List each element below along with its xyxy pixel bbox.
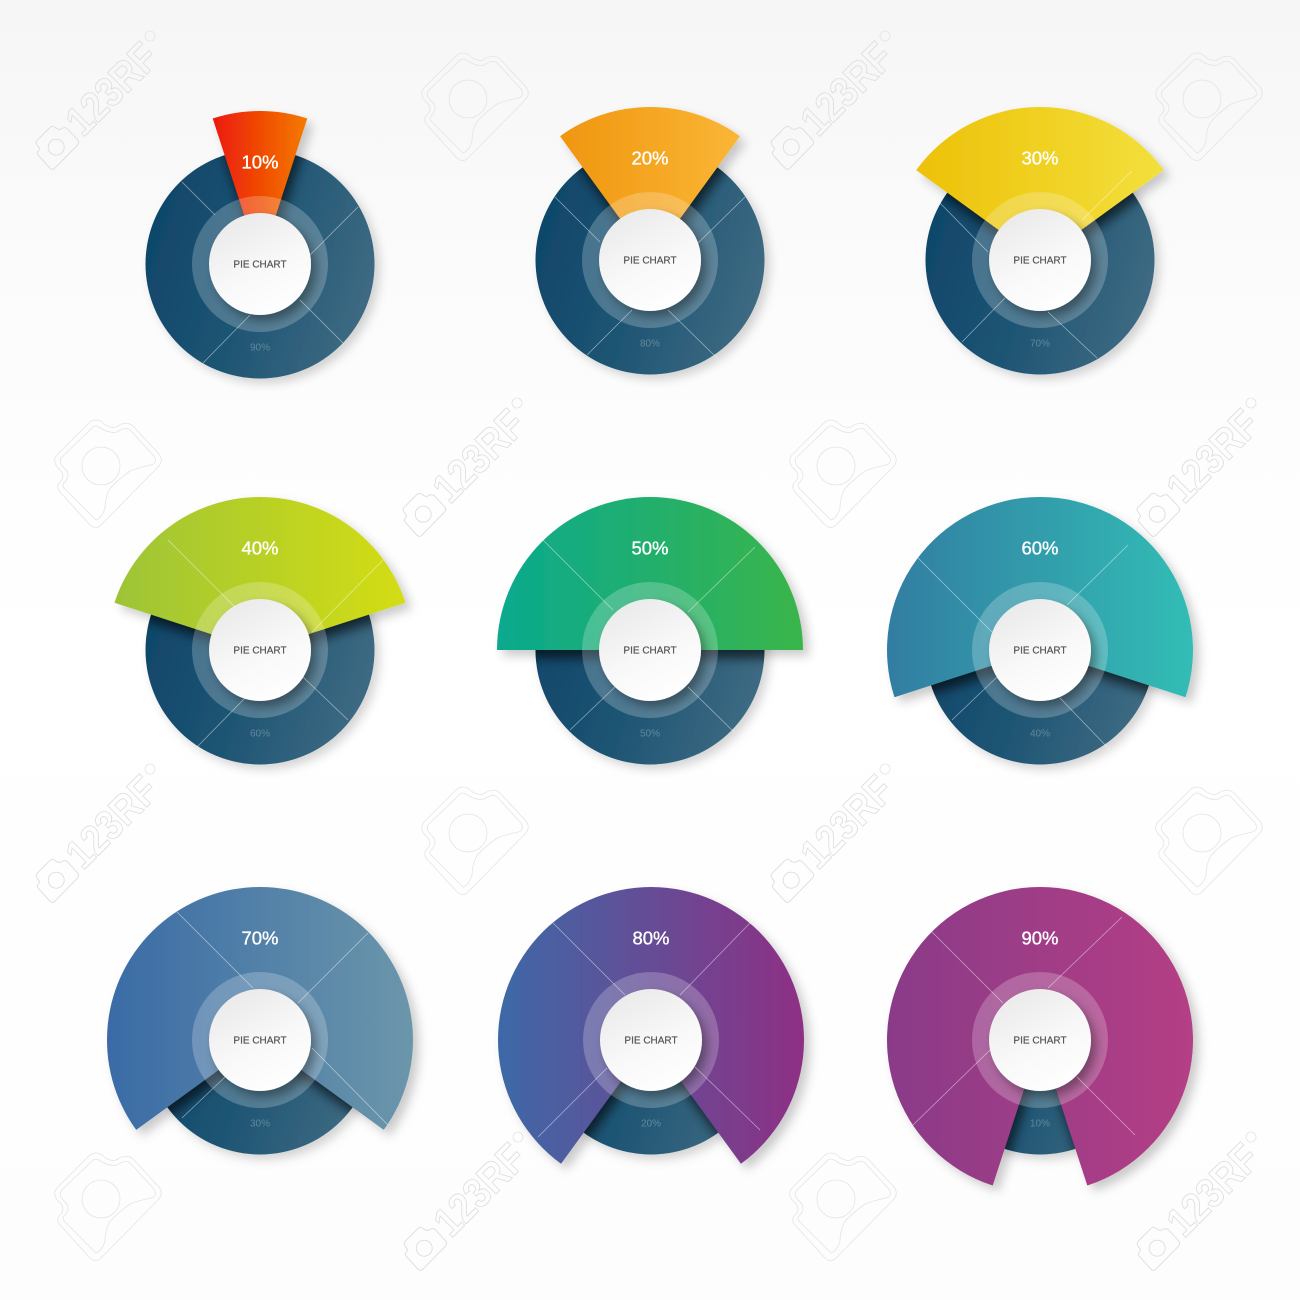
wedge shadow on disk <box>1004 1088 1076 1152</box>
wedge shadow on disk <box>584 1082 718 1140</box>
translucent ring <box>972 582 1108 718</box>
pie chart 30% <box>916 107 1166 374</box>
watermark logo 6: 123RF <box>791 766 902 877</box>
value label: 60% <box>1021 538 1059 558</box>
base disk <box>536 536 764 764</box>
wedge 50% <box>497 497 803 650</box>
centre label: PIE CHART <box>1013 646 1067 656</box>
remainder label: 30% <box>250 1118 270 1130</box>
centre circle <box>989 989 1091 1091</box>
pie chart 40% <box>114 497 408 764</box>
centre circle <box>209 599 311 701</box>
watermark logo 5 <box>36 764 167 902</box>
pie chart 80% <box>498 887 806 1172</box>
translucent ring <box>192 972 328 1108</box>
centre label: PIE CHART <box>233 646 287 656</box>
watermark logo 7: 123RF <box>424 1134 535 1245</box>
translucent ring <box>972 192 1108 328</box>
pie chart 10% <box>146 111 374 378</box>
centre label: PIE CHART <box>233 1036 287 1046</box>
remainder label: 60% <box>250 728 270 740</box>
pie chart 50% <box>497 497 805 764</box>
centre circle <box>989 209 1091 311</box>
watermark logo 4: 123RF <box>1157 400 1268 511</box>
watermark: egg icon middle left <box>55 420 161 528</box>
centre circle <box>209 213 311 315</box>
wedge 30% <box>916 107 1164 260</box>
remainder label: 20% <box>641 1118 661 1130</box>
centre label: PIE CHART <box>624 1036 678 1046</box>
remainder label: 10% <box>1030 1118 1050 1130</box>
wedge shadow on disk <box>941 192 1140 240</box>
value label: 80% <box>632 928 670 948</box>
remainder label: 90% <box>250 342 270 354</box>
wedge 60% <box>887 497 1193 697</box>
watermark logo 7 <box>404 1132 535 1270</box>
centre circle <box>209 989 311 1091</box>
centre label: PIE CHART <box>623 646 677 656</box>
translucent ring <box>582 582 718 718</box>
watermark logo 1: 123RF <box>56 33 167 144</box>
centre label: PIE CHART <box>1013 256 1067 266</box>
wedge shadow on disk <box>536 650 764 665</box>
wedge 20% <box>560 107 740 260</box>
remainder label: 40% <box>1030 728 1050 740</box>
watermark logo 2 <box>771 31 902 169</box>
base disk <box>536 926 766 1154</box>
watermark logo 8: 123RF <box>1157 1134 1268 1245</box>
pie chart 60% <box>887 497 1195 764</box>
centre circle <box>599 209 701 311</box>
base disk <box>146 536 374 764</box>
translucent ring <box>192 196 328 332</box>
value label: 40% <box>241 538 279 558</box>
wedge 70% <box>107 887 413 1130</box>
translucent ring <box>583 972 719 1108</box>
translucent ring <box>972 972 1108 1108</box>
wedge shadow on disk <box>148 614 372 646</box>
centre label: PIE CHART <box>233 260 287 270</box>
centre circle <box>989 599 1091 701</box>
remainder label: 80% <box>640 338 660 350</box>
pie chart 70% <box>107 887 415 1154</box>
base disk <box>536 146 764 374</box>
watermark: egg icon lower middle <box>422 787 528 894</box>
watermark logo 8 <box>1137 1132 1268 1270</box>
value label: 10% <box>241 152 279 172</box>
base disk <box>926 146 1154 374</box>
base disk <box>926 536 1154 764</box>
pie chart 20% <box>536 107 764 374</box>
value label: 50% <box>631 538 669 558</box>
base disk <box>146 926 374 1154</box>
wedge 10% <box>213 111 307 264</box>
watermark: egg icon top middle <box>422 53 528 160</box>
value label: 20% <box>631 148 669 168</box>
value label: 30% <box>1021 148 1059 168</box>
wedge shadow on disk <box>218 155 306 219</box>
watermark logo 3 <box>403 398 534 536</box>
watermark: egg icon lower right <box>1156 787 1262 894</box>
remainder label: 50% <box>640 728 660 740</box>
watermark logo 1 <box>36 31 167 169</box>
value label: 90% <box>1021 928 1059 948</box>
pie chart 90% <box>887 887 1195 1194</box>
wedge 40% <box>114 497 406 650</box>
translucent ring <box>582 192 718 328</box>
watermark: egg icon bottom left <box>55 1153 161 1260</box>
watermark: egg icon middle centre <box>790 420 896 528</box>
base disk <box>926 926 1154 1154</box>
watermark logo 5: 123RF <box>56 766 167 877</box>
watermark logo 4 <box>1137 398 1268 536</box>
remainder label: 70% <box>1030 338 1050 350</box>
value label: 70% <box>241 928 279 948</box>
watermark logo 2: 123RF <box>791 33 902 144</box>
translucent ring <box>192 582 328 718</box>
wedge shadow on disk <box>168 1070 352 1118</box>
watermark: egg icon top right <box>1156 53 1262 160</box>
thin diagonal overlay lines <box>168 171 1135 1137</box>
centre label: PIE CHART <box>1013 1036 1067 1046</box>
watermark logo 3: 123RF <box>423 400 534 511</box>
wedge 80% <box>498 887 804 1164</box>
wedge shadow on disk <box>576 168 727 226</box>
base disk <box>146 150 374 378</box>
wedge 90% <box>887 887 1193 1186</box>
centre circle <box>599 599 701 701</box>
watermark logo 6 <box>771 764 902 902</box>
centre circle <box>600 989 702 1091</box>
watermark: egg icon bottom centre <box>790 1153 896 1260</box>
wedge shadow on disk <box>931 666 1149 699</box>
centre label: PIE CHART <box>623 256 677 266</box>
